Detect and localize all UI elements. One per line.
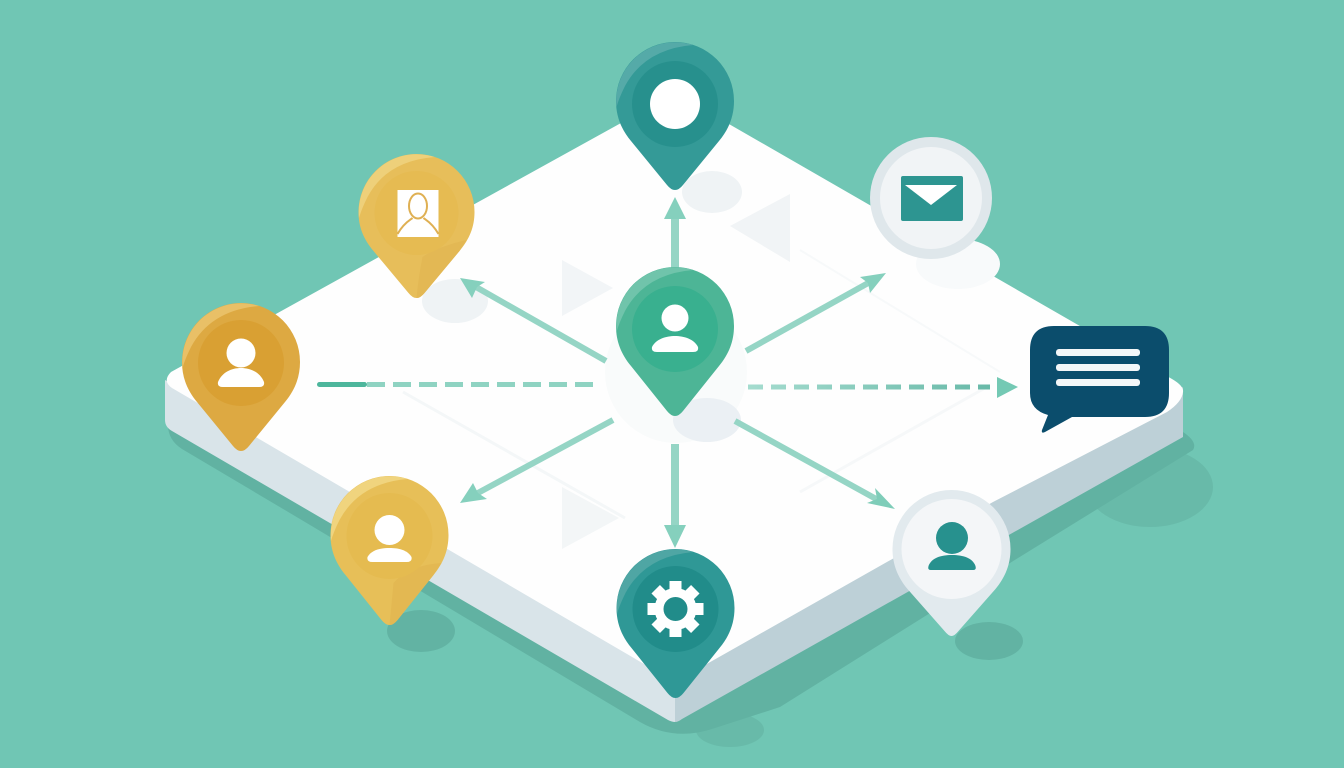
arrow: to envelope [746, 273, 886, 351]
pin: bottom teal gear [616, 549, 734, 698]
icon: portrait card [398, 190, 438, 237]
icon: teal person [928, 522, 976, 570]
platform top surface [167, 95, 1183, 680]
dashed arrow: to speech bubble [748, 377, 1018, 398]
icon: person [652, 304, 698, 352]
pin: upper left gold [358, 154, 474, 298]
arrow: up to top pin [664, 197, 686, 269]
arrow: to lower left pin [460, 420, 613, 503]
platform right face [675, 387, 1183, 722]
pin: left orange [182, 303, 300, 451]
pin ground shadows [387, 171, 1023, 660]
arrow: down to gear pin [664, 444, 686, 548]
icon: gear [648, 581, 704, 637]
faint map details [403, 194, 1000, 549]
icon: person [218, 338, 264, 387]
pin: top teal [616, 42, 734, 190]
platform shadow [168, 425, 1213, 747]
icon: person [367, 515, 412, 562]
dashed arrow: from left pin [317, 382, 597, 387]
envelope badge [870, 137, 992, 259]
bubble text lines [1056, 349, 1140, 386]
pin: lower left yellow [330, 476, 448, 625]
arrow: to lower right pin [735, 421, 895, 509]
icon: envelope [901, 176, 963, 221]
pin: lower right white [892, 490, 1010, 636]
isometric platform [165, 95, 1183, 722]
speech bubble [1030, 326, 1169, 433]
pin: center green [616, 267, 734, 416]
platform left face [165, 380, 675, 722]
icon: white dot [650, 79, 700, 129]
arrow: to upper left pin [460, 278, 606, 361]
